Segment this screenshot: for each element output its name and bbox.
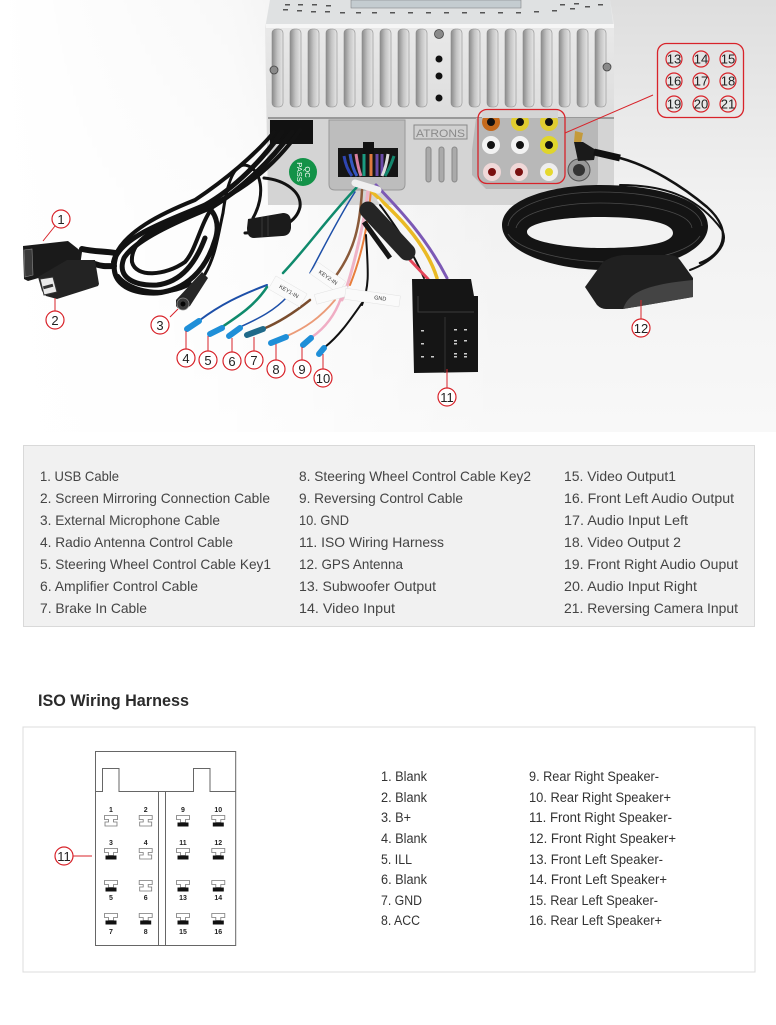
ISO connector pin diagram: 12 (214, 840, 222, 847)
number markers 1 to 12: 8 (272, 362, 280, 377)
callout: numbers 13 to 21: 15 (721, 52, 735, 66)
legend column 1: 4. Radio Antenna Control Cable (40, 534, 233, 550)
legend column 2: 8. Steering Wheel Control Cable Key2 (299, 468, 531, 484)
number markers 1 to 12: 3 (156, 318, 164, 333)
RCA connectors (482, 110, 558, 178)
callout: numbers 13 to 21: 16 (667, 74, 681, 88)
ISO connector pin diagram: 11 (179, 840, 187, 847)
pin list right: 12. Front Right Speaker+ (529, 831, 676, 846)
ISO connector pin diagram: 3 (109, 840, 113, 847)
pin list left: 2. Blank (381, 790, 427, 805)
ISO connector pin diagram (96, 752, 236, 946)
number markers 1 to 12: 5 (204, 353, 212, 368)
colored wires (200, 183, 447, 347)
pin list left: 4. Blank (381, 831, 427, 846)
ISO connector pin diagram: 10 (214, 807, 222, 814)
insulated blue wire tips (187, 321, 324, 354)
wire harness ferrite sleeve (364, 210, 407, 258)
heading: ISO Wiring Harness: ISO Wiring Harness (38, 691, 189, 710)
callout: numbers 13 to 21: 13 (667, 52, 681, 66)
pin list right: 11. Front Right Speaker- (529, 810, 672, 825)
ISO connector pin diagram: 14 (214, 895, 222, 902)
legend column 3: 21. Reversing Camera Input (564, 600, 738, 616)
legend column 1: 5. Steering Wheel Control Cable Key1 (40, 556, 271, 572)
wire labels: KEY1-IN (278, 284, 299, 300)
pin list left: 6. Blank (381, 872, 427, 887)
number markers 1 to 12: 10 (316, 371, 330, 386)
pin list right: 16. Rear Left Speaker+ (529, 913, 662, 928)
legend column 1: 7. Brake In Cable (40, 600, 147, 616)
callout: numbers 13 to 21: 21 (721, 96, 735, 112)
number markers 1 to 12: 7 (250, 353, 258, 368)
wire labels (268, 262, 400, 307)
callout line from ports to legend (565, 95, 653, 133)
legend column 1: 1. USB Cable (40, 468, 119, 484)
number markers 1 to 12: 4 (182, 351, 190, 366)
QC pass sticker (289, 158, 317, 186)
pin list left: 1. Blank (381, 769, 427, 784)
ISO connector pin diagram: 1 (109, 807, 113, 814)
legend column 2: 10. GND (299, 512, 349, 528)
callout: numbers 13 to 21 (658, 44, 744, 118)
pin list left: 7. GND (381, 893, 422, 908)
ISO connector pin diagram: 13 (179, 895, 187, 902)
callout: numbers 13 to 21: 18 (721, 74, 735, 88)
head unit chassis (265, 0, 614, 205)
ISO connector pin diagram: 2 (144, 807, 148, 814)
callout: red box around RCA ports (478, 110, 565, 184)
number markers 1 to 12: 9 (298, 362, 306, 377)
number markers 1 to 12: 2 (51, 313, 59, 328)
ISO connector pin diagram: 16 (214, 929, 222, 936)
marker 11: 11 (57, 849, 71, 864)
ferrite choke (247, 213, 291, 238)
legend column 3: 20. Audio Input Right (564, 578, 697, 594)
legend column 3: 16. Front Left Audio Output (564, 490, 734, 506)
legend column 3: 15. Video Output1 (564, 468, 676, 484)
legend column 2: 9. Reversing Control Cable (299, 490, 463, 506)
legend column 3: 17. Audio Input Left (564, 512, 688, 528)
legend column 1: 2. Screen Mirroring Connection Cable (40, 490, 270, 506)
pin list left: 5. ILL (381, 852, 412, 867)
legend column 2: 13. Subwoofer Output (299, 578, 436, 594)
pin list right (529, 769, 676, 928)
GPS antenna socket and plug (568, 131, 723, 263)
head unit chassis: ATRONS (416, 128, 465, 140)
microphone jack (176, 272, 208, 310)
ISO connector pin diagram: 4 (144, 840, 148, 847)
legend column 3 (564, 468, 738, 616)
panel: cable legend (24, 446, 754, 626)
legend column 1: 3. External Microphone Cable (40, 512, 220, 528)
bundled black cables (82, 130, 300, 293)
legend column 2: 12. GPS Antenna (299, 556, 403, 572)
ISO connector (412, 279, 478, 373)
pin list right: 15. Rear Left Speaker- (529, 893, 658, 908)
wire labels: GND (374, 295, 387, 303)
callout: numbers 13 to 21: 20 (694, 96, 708, 112)
pin list left (381, 769, 427, 928)
number markers 1 to 12: 12 (634, 321, 648, 336)
legend column 2: 11. ISO Wiring Harness (299, 534, 444, 550)
legend column 3: 19. Front Right Audio Ouput (564, 556, 738, 572)
heat sink fins (272, 29, 606, 107)
number markers 1 to 12: 11 (440, 390, 454, 405)
legend column 1: 6. Amplifier Control Cable (40, 578, 198, 594)
pin list right: 14. Front Left Speaker+ (529, 872, 667, 887)
panel: ISO wiring harness (23, 727, 755, 972)
wiring plug (338, 142, 398, 177)
callout: numbers 13 to 21: 17 (694, 74, 708, 88)
callout: numbers 13 to 21: 14 (694, 52, 708, 66)
pin list left: 3. B+ (381, 810, 411, 825)
wire labels: KEY2-IN (317, 270, 338, 287)
pin list right: 13. Front Left Speaker- (529, 852, 663, 867)
USB connector 1 (23, 241, 82, 281)
callout: numbers 13 to 21: 19 (667, 96, 681, 112)
legend column 1 (40, 468, 271, 616)
GPS antenna puck (585, 255, 693, 309)
number markers 1 to 12: 6 (228, 354, 236, 369)
ISO connector pin diagram: 7 (109, 929, 113, 936)
QC pass sticker: QC (303, 166, 312, 178)
ISO connector pin diagram: 15 (179, 929, 187, 936)
pin list right: 9. Rear Right Speaker- (529, 769, 659, 784)
pin list left: 8. ACC (381, 913, 420, 928)
legend column 3: 18. Video Output 2 (564, 534, 681, 550)
number markers 1 to 12 (43, 210, 650, 406)
number markers 1 to 12: 1 (57, 212, 65, 227)
legend column 2: 14. Video Input (299, 600, 395, 616)
ISO connector pin diagram: 6 (144, 895, 148, 902)
USB connector 2 (38, 260, 99, 299)
ISO connector pin diagram: 8 (144, 929, 148, 936)
QC pass sticker: PASS (295, 162, 304, 182)
legend column 2 (299, 468, 531, 616)
GPS cable coil (502, 185, 724, 270)
ISO connector pin diagram: 5 (109, 895, 113, 902)
marker 11 (55, 847, 92, 865)
ISO connector pin diagram: 9 (181, 807, 185, 814)
photo: head unit with cables (0, 0, 776, 432)
pin list right: 10. Rear Right Speaker+ (529, 790, 671, 805)
